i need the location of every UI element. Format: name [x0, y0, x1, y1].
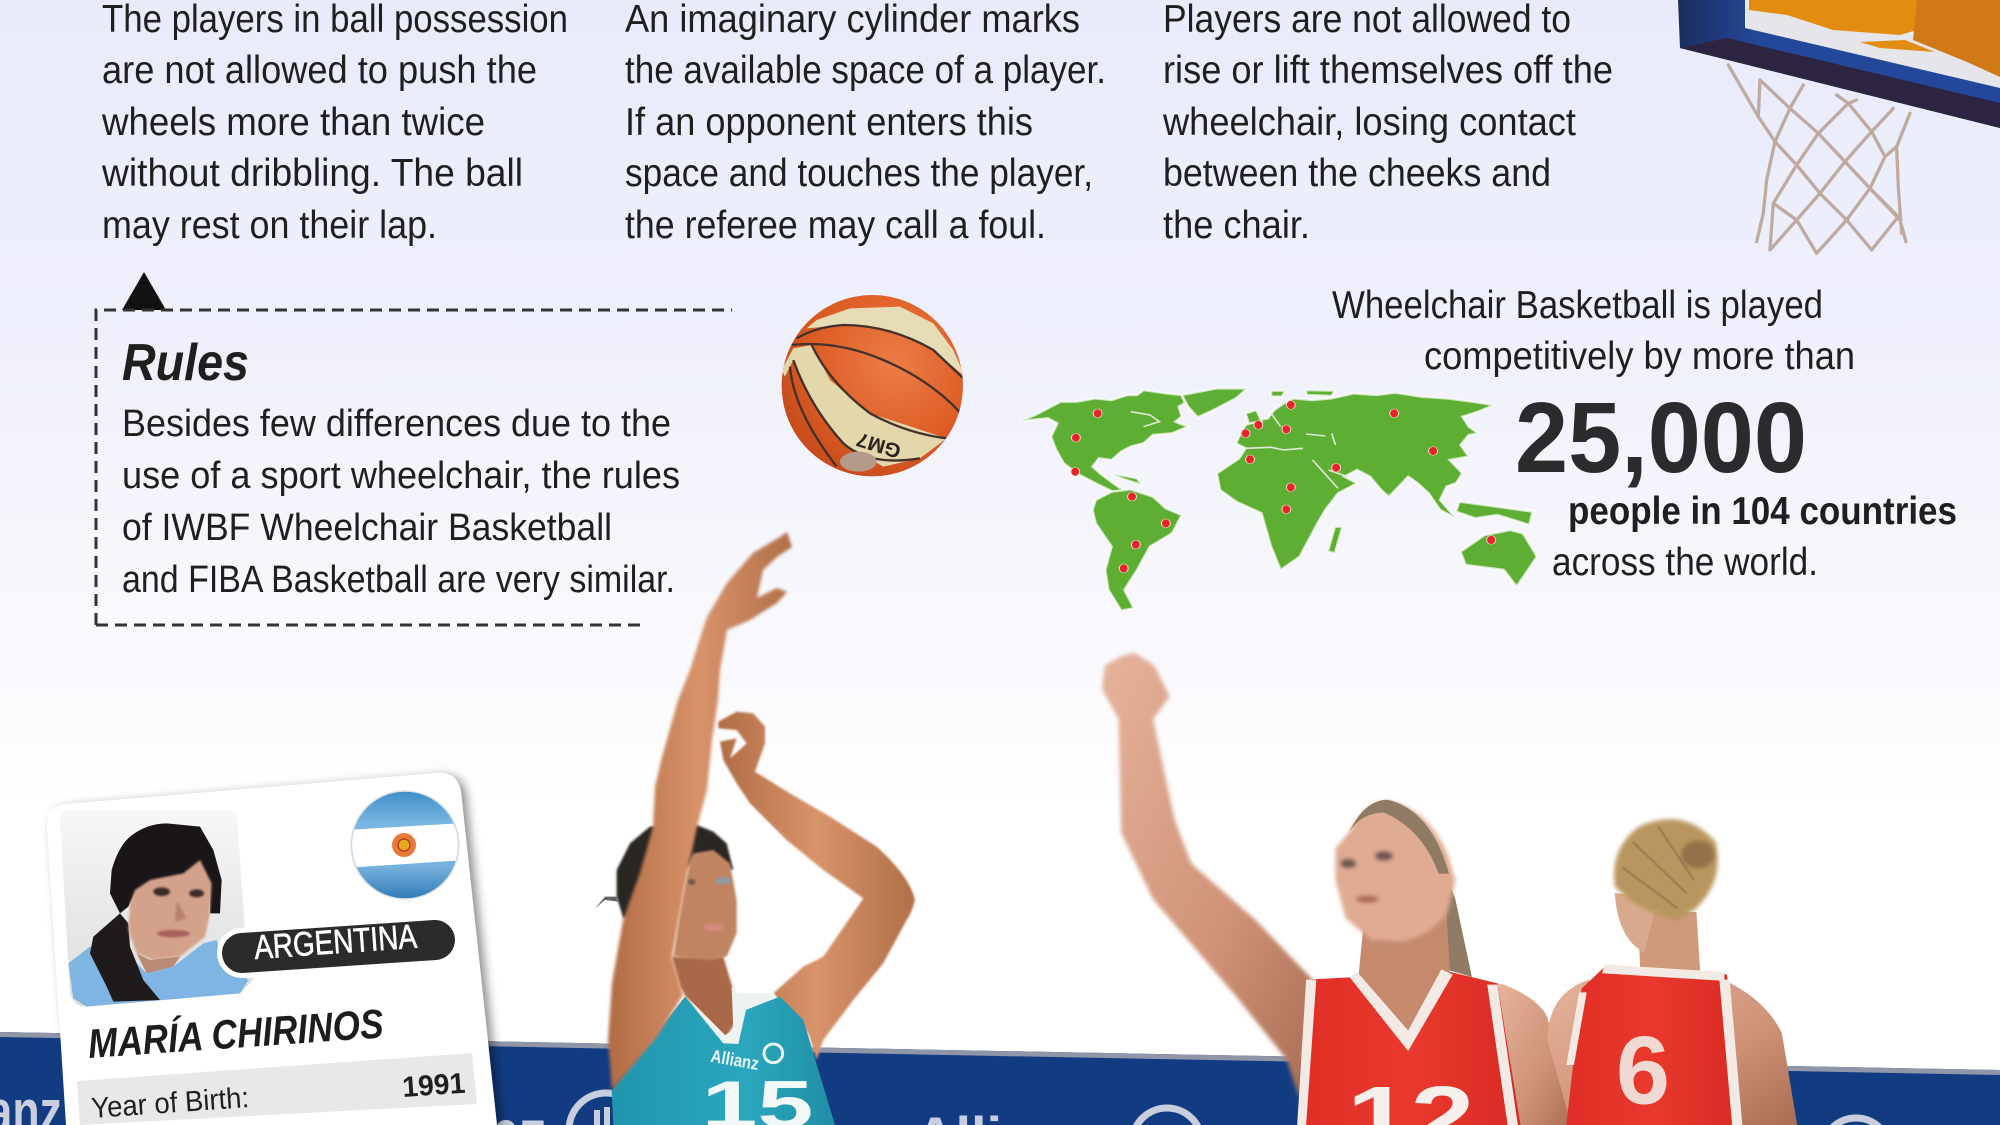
panel: player card [47, 773, 497, 1125]
rule text: dribbling: wheels more than twice [101, 101, 485, 144]
player face [1335, 801, 1455, 941]
statistic text: 25,000 people: competitively by more than [1424, 335, 1855, 378]
statistic text: 25,000 people: across the world. [1552, 541, 1818, 584]
rule text: lifting [1162, 0, 1613, 247]
card row: year of birth [77, 1053, 477, 1125]
player facial features [1341, 851, 1393, 902]
shooter jersey [612, 987, 835, 1125]
shooter supporting arm [718, 712, 915, 1060]
rule text: dribbling: without dribbling. The ball [101, 152, 523, 195]
shooter face [673, 850, 737, 960]
player hair [1614, 819, 1718, 921]
figure: shooter in teal jersey [595, 712, 915, 1125]
player photo [60, 810, 253, 1007]
rule text: dribbling: may rest on their lap. [102, 204, 437, 247]
player raised arm and hand [1102, 653, 1312, 1099]
figure: player in red jersey number 12 [1102, 653, 1574, 1125]
rules body text [122, 403, 680, 601]
rules body text: and FIBA Basketball are very similar. [122, 559, 675, 601]
rule text: dribbling [101, 0, 568, 247]
rule text: cylinder: the available space of a player. [625, 49, 1106, 92]
hoop net [1728, 65, 1910, 253]
figure: player in red jersey number 6 [1547, 819, 1797, 1125]
rule text: lifting: the chair. [1163, 204, 1310, 247]
rule text: lifting: between the cheeks and [1163, 152, 1551, 195]
icon: basketball hoop [1678, 0, 2000, 253]
statistic text: 25,000 people: 25,000 [1515, 382, 1807, 494]
map water detail [1131, 412, 1348, 488]
sponsor logo centre [915, 1105, 1202, 1125]
flag: Argentina [345, 791, 465, 899]
ball lettering: GM7 [854, 428, 904, 462]
map: world with player locations [1019, 388, 1537, 611]
rules body text: use of a sport wheelchair, the rules [122, 455, 680, 497]
card row: year of birth: Year of Birth: [90, 1082, 250, 1125]
portrait facial features [153, 887, 204, 937]
map land masses [1019, 388, 1537, 611]
card row: year of birth: 1991 [401, 1068, 466, 1104]
player jersey [1566, 964, 1742, 1125]
rule text: lifting: rise or lift themselves off the [1163, 49, 1613, 92]
rules body text: of IWBF Wheelchair Basketball [122, 507, 612, 549]
shooter hair [617, 825, 733, 918]
rule text: cylinder: the referee may call a foul. [625, 204, 1046, 247]
player neck and far arm [1358, 912, 1450, 1042]
player arms [1547, 980, 1797, 1125]
statistic text: 25,000 people: people in 104 countries [1568, 490, 1957, 533]
figure: shooter raised arm and hand [608, 532, 792, 1090]
backboard white panel [1747, 5, 2000, 90]
arrow: triangle pointer [122, 272, 166, 310]
player ponytail [1436, 857, 1472, 977]
sponsor logo middle [367, 1093, 643, 1125]
rule text: lifting: wheelchair, losing contact [1162, 101, 1576, 144]
statistic text: 25,000 people: Wheelchair Basketball is played [1332, 284, 1823, 327]
sponsor banner [0, 1032, 2000, 1125]
player jersey [1297, 969, 1520, 1125]
shooter neck [672, 957, 737, 1040]
jersey number: 6 [1616, 1015, 1670, 1124]
player name: MARÍA CHIRINOS [86, 1000, 385, 1067]
heading: rules: Rules [122, 334, 249, 392]
icon: basketball [782, 295, 965, 476]
jersey sponsor: Allianz [709, 1046, 760, 1074]
panel: rules [96, 310, 732, 625]
map location dots [1071, 401, 1496, 573]
backboard blue frame [1678, 0, 2000, 128]
rule text: dribbling: are not allowed to push the [102, 49, 537, 92]
backboard orange target [1749, 0, 1917, 35]
label: country pill: ARGENTINA [253, 918, 418, 967]
rule text: cylinder: space and touches the player, [625, 152, 1093, 195]
rule text: cylinder [625, 0, 1106, 247]
ball valve [840, 452, 877, 472]
rule text: cylinder: If an opponent enters this [625, 101, 1033, 144]
player neck [1638, 912, 1700, 972]
shooter facial features [688, 877, 732, 931]
sponsor logo right [1822, 1118, 1890, 1125]
rules body text: Besides few differences due to the [122, 403, 671, 445]
statistic text: 25,000 people [1332, 284, 1957, 584]
